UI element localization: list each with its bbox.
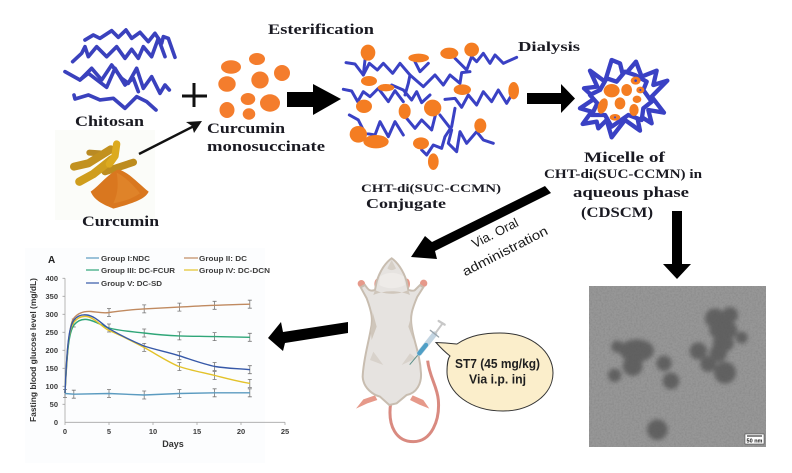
arrow: curcumin to monosuccinate: [139, 121, 202, 154]
panel letter: A: [48, 255, 55, 266]
error bars: [63, 300, 252, 399]
label: Micelle description: CHT-di(SUC-CCMN) in: [544, 166, 703, 181]
arrow: oral administration: [411, 186, 551, 259]
syringe: [410, 321, 445, 364]
y axis tick labels: 200: [45, 346, 58, 355]
feet and hands: [356, 279, 429, 409]
heading: Dialysis: Dialysis: [518, 40, 581, 55]
label: Via. Oral administration: [460, 215, 550, 279]
label: Curcumin monosuccinate: [207, 121, 325, 155]
label: Micelle description: aqueous phase: [573, 185, 690, 201]
legend: [86, 254, 270, 288]
x axis title: Days: [162, 439, 184, 449]
label: CHT-di(SUC-CCMN) Conjugate: CHT-di(SUC-CCMN): [361, 181, 501, 195]
legend: Group V: DC-SD: [101, 279, 163, 288]
heading: Esterification: Esterification: [268, 22, 375, 38]
scale bar: 50 nm: [747, 438, 763, 444]
callout: ST7 dose: Via i.p. inj: [469, 372, 526, 386]
label: Micelle description: [544, 150, 703, 221]
y axis title: Fasting blood glucose level (mg/dL): [28, 278, 38, 422]
callout: ST7 dose: [436, 333, 553, 411]
label: Chitosan: Chitosan: [75, 114, 145, 130]
chart: fasting blood glucose: [25, 248, 289, 463]
legend: Group I:NDC: [101, 254, 151, 263]
arrow: down to TEM image: [663, 211, 691, 279]
axes: [62, 278, 285, 425]
x axis tick labels: 25: [281, 427, 289, 436]
curcumin photo: [55, 130, 155, 220]
y axis tick labels: 50: [50, 400, 58, 409]
label: Micelle description: (CDSCM): [581, 205, 653, 221]
curcumin monosuccinate particles: [218, 53, 290, 120]
y axis tick labels: 400: [45, 274, 58, 283]
x axis tick labels: [63, 427, 289, 436]
y axis tick labels: 350: [45, 292, 58, 301]
tail: [390, 361, 439, 442]
y axis tick labels: 150: [45, 364, 58, 373]
arrow: dialysis: [527, 84, 575, 113]
label: CHT-di(SUC-CCMN) Conjugate: [361, 181, 501, 212]
x axis tick labels: 15: [193, 427, 201, 436]
y axis tick labels: 300: [45, 310, 58, 319]
x axis tick labels: 5: [107, 427, 111, 436]
rat illustration: [356, 258, 445, 442]
arrow: rat to chart: [268, 322, 348, 351]
chitosan polymer chains: [65, 30, 175, 110]
plus sign: [182, 83, 207, 107]
x axis tick labels: 20: [237, 427, 245, 436]
y axis tick labels: [45, 274, 58, 427]
y axis tick labels: 100: [45, 382, 58, 391]
label: Curcumin: Curcumin: [82, 214, 160, 230]
body: [361, 258, 423, 405]
x axis tick labels: 10: [149, 427, 157, 436]
label: CHT-di(SUC-CCMN) Conjugate: Conjugate: [366, 197, 446, 212]
legend: Group IV: DC-DCN: [199, 266, 270, 275]
label: Via. Oral administration: Via. Oral: [469, 215, 521, 251]
y axis tick labels: 0: [54, 418, 58, 427]
callout: ST7 dose: ST7 (45 mg/kg): [455, 357, 540, 371]
scale bar: [745, 434, 764, 444]
x axis tick labels: 0: [63, 427, 67, 436]
legend: Group II: DC: [199, 254, 248, 263]
conjugate structure: [343, 43, 519, 170]
label: Via. Oral administration: administration: [460, 223, 550, 279]
legend: Group III: DC-FCUR: [101, 266, 176, 275]
label: Curcumin monosuccinate: Curcumin: [207, 121, 286, 137]
arrow: esterification: [287, 84, 341, 115]
label: Curcumin monosuccinate: monosuccinate: [207, 139, 325, 155]
micelle: [580, 60, 667, 137]
label: Micelle description: Micelle of: [584, 150, 665, 166]
data lines: [65, 304, 250, 395]
TEM micrograph: [589, 286, 766, 447]
y axis tick labels: 250: [45, 328, 58, 337]
